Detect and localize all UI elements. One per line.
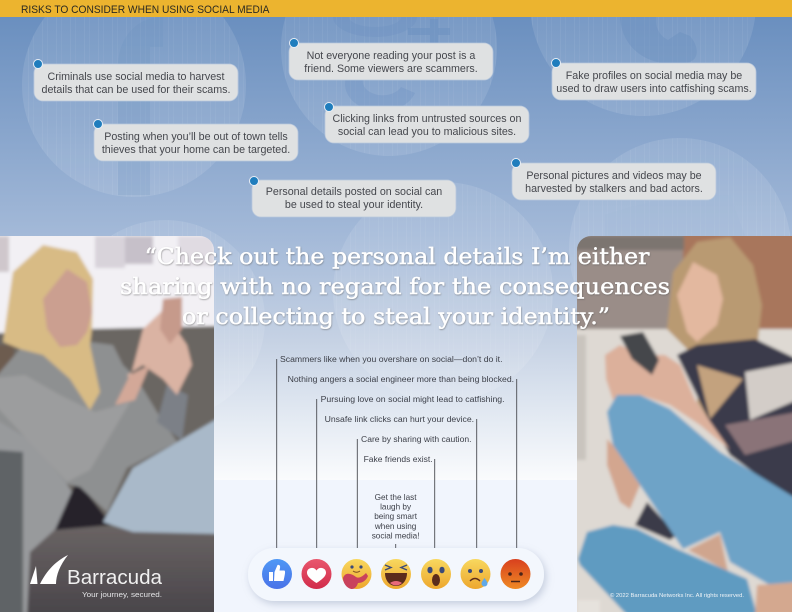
callout: not everyone (289, 38, 493, 80)
reaction messages (280, 355, 514, 540)
callout: personal details: be used to steal your identity. (285, 199, 423, 211)
callout: out of town (94, 120, 298, 161)
icon: facebook circle (22, 0, 246, 197)
quote: “Check out the personal details I’m either (144, 245, 650, 270)
laugh message: social media! (372, 532, 419, 540)
laugh message (372, 493, 419, 540)
callout: out of town: thieves that your home can be targeted. (102, 144, 290, 156)
callout: harvest details: Criminals use social media to harvest (47, 71, 225, 83)
icon: care (342, 559, 372, 589)
callout: fake profiles (552, 58, 756, 100)
laugh message: Get the last (375, 493, 417, 502)
callout: untrusted links: social can lead you to malicious sites. (338, 126, 516, 138)
icon: haha (381, 559, 411, 589)
reactions bar (248, 548, 544, 601)
quote: sharing with no regard for the consequences (120, 275, 670, 300)
icon: google plus circle (281, 17, 497, 156)
icon: love (302, 559, 332, 589)
callout: not everyone: friend. Some viewers are scammers. (304, 63, 478, 75)
callout: untrusted links: Clicking links from untrusted sources on (333, 113, 521, 125)
callout: pictures and videos (512, 158, 716, 200)
background social media icons (22, 17, 790, 340)
callout: out of town: Posting when you’ll be out of town tells (104, 131, 288, 143)
icon: sad (460, 559, 490, 589)
photo: woman on dark sofa (0, 231, 220, 612)
icon: angry (500, 559, 530, 589)
reaction messages: Fake friends exist. (364, 455, 433, 464)
icon: phone circle (531, 17, 755, 116)
callout: pictures and videos: harvested by stalkers and bad actors. (525, 183, 703, 195)
callout: harvest details (34, 60, 238, 101)
copyright: © 2022 Barracuda Networks Inc. All rights reserved. (610, 592, 744, 599)
photo: woman on light sofa (572, 231, 792, 612)
icon: like (262, 559, 292, 589)
reaction messages: Scammers like when you overshare on social—don’t do it. (280, 355, 502, 364)
icon: lower centre circle (336, 182, 552, 340)
callout: harvest details: details that can be used for their scams. (42, 84, 230, 96)
quote (120, 245, 670, 330)
laugh message: when using (374, 522, 417, 531)
header title: RISKS TO CONSIDER WHEN USING SOCIAL MEDIA (21, 4, 270, 16)
header bar (0, 0, 792, 17)
callout: not everyone: Not everyone reading your post is a (307, 50, 475, 62)
quote: or collecting to steal your identity.” (182, 305, 610, 330)
icon: wow (421, 559, 451, 589)
Barracuda logo (30, 555, 163, 599)
laugh message: being smart (374, 512, 418, 521)
callout: pictures and videos: Personal pictures and videos may be (526, 170, 702, 182)
laugh message: laugh by (380, 502, 412, 512)
callout: untrusted links (324, 102, 529, 143)
reaction leader lines (277, 359, 517, 552)
reaction messages: Unsafe link clicks can hurt your device. (325, 415, 474, 424)
Barracuda logo: Your journey, secured. (82, 590, 162, 599)
callout: personal details: Personal details posted on social can (266, 186, 442, 198)
reaction messages: Care by sharing with caution. (361, 435, 472, 444)
icon: camera circle (569, 138, 790, 282)
callout: personal details (250, 176, 456, 217)
callout: fake profiles: used to draw users into catfishing scams. (556, 83, 752, 95)
icon: lower left circle (112, 220, 258, 340)
Barracuda logo: Barracuda (67, 566, 163, 589)
reaction messages: Pursuing love on social might lead to catfishing. (321, 395, 505, 404)
callout: fake profiles: Fake profiles on social media may be (566, 70, 742, 82)
reaction messages: Nothing angers a social engineer more than being blocked. (288, 375, 514, 384)
